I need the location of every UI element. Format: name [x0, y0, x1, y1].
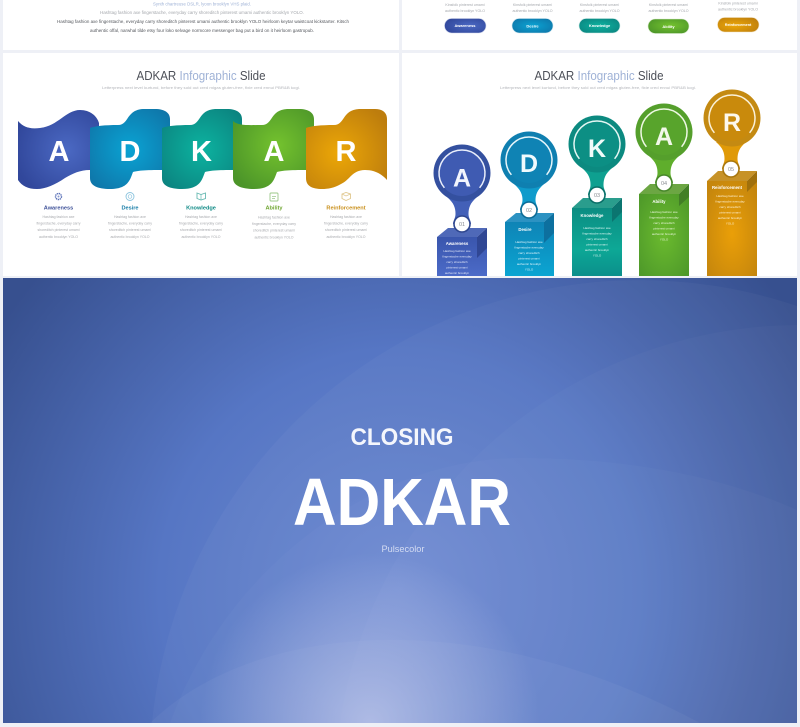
icon: target	[126, 192, 134, 200]
pill: Reinforcement: authentic brooklyn YOLO	[718, 8, 758, 12]
pin: 05	[728, 167, 734, 173]
block: pinterest umami	[719, 210, 741, 214]
pin: K	[588, 135, 606, 163]
panel: top left slide fragment	[3, 0, 399, 50]
column: Awareness: fingerstache, everyday carry	[37, 222, 81, 226]
column: Ability	[252, 193, 296, 240]
pin	[704, 90, 760, 177]
subtitle: ribbon slide: Letterpress next level kurtund, before they sold out cred migas gluten-free, fixie cred ennui PBR&B kogi.	[102, 85, 300, 90]
ribbon: five wave segments	[18, 109, 387, 189]
column: Ability: Ability	[265, 206, 283, 212]
column: Ability: authentic brooklyn YOLO	[254, 236, 294, 240]
pill: Desire: Desire	[526, 24, 539, 28]
column: Awareness: authentic brooklyn YOLO	[39, 235, 78, 239]
block: carry shoreditch	[719, 205, 741, 209]
pill: Knowledge: authentic brooklyn YOLO	[579, 9, 620, 13]
block	[505, 213, 554, 276]
block: Knowledge	[581, 213, 604, 218]
pill: Awareness: Kinsfolk pinterest umami	[445, 3, 485, 7]
icon: gear	[56, 194, 62, 200]
column: Reinforcement: shoreditch pinterest umami	[325, 228, 367, 232]
top left text block	[57, 2, 350, 33]
block: Ability	[652, 199, 666, 204]
pill: Awareness: authentic brooklyn YOLO	[445, 9, 485, 13]
ribbon segment R	[306, 109, 387, 189]
step 5: Reinforcement block and pin	[704, 90, 760, 276]
block: fingerstache everyday	[649, 216, 679, 220]
block: Hashtag fashion axe	[583, 226, 611, 230]
block: YOLO	[593, 254, 602, 258]
subtitle: pin slide: Letterpress next level kurtund, before they sold out cred migas gluten-free, fixie cred ennui PBR&B kogi.	[500, 85, 696, 90]
block: carry shoreditch	[586, 237, 608, 241]
block: authentic brooklyn	[718, 216, 743, 220]
panel: pin and block ADKAR slide	[402, 53, 797, 276]
block: pinterest umami	[446, 266, 468, 270]
icon: book	[197, 193, 206, 200]
ribbon segment K: K	[191, 136, 212, 168]
block: fingerstache everyday	[442, 254, 472, 258]
block: Desire	[518, 227, 532, 232]
block: carry shoreditch	[446, 260, 468, 264]
column: Reinforcement: fingerstache, everyday carry	[324, 222, 368, 226]
column: Desire: Hashtag fashion axe	[114, 215, 146, 219]
column: Reinforcement: Reinforcement	[326, 206, 366, 212]
pin	[434, 144, 490, 232]
pin	[636, 104, 692, 191]
column: Knowledge: Hashtag fashion axe	[185, 215, 217, 219]
block: Hashtag fashion axe	[515, 240, 543, 244]
pill: Reinforcement	[718, 2, 759, 32]
pin: D	[520, 150, 538, 178]
block: Hashtag fashion axe	[650, 210, 678, 214]
block: YOLO	[660, 238, 669, 242]
block	[707, 171, 757, 276]
pin	[568, 116, 626, 203]
closing title: ADKAR	[293, 465, 511, 540]
column: Desire: Desire	[121, 206, 139, 212]
pill: Knowledge: Kinsfolk pinterest umami	[580, 3, 619, 7]
step 2: Desire block and pin	[500, 132, 558, 276]
panel: top right slide fragment	[402, 0, 797, 50]
pill: Reinforcement: Reinforcement	[725, 23, 752, 27]
icon: clipboard	[270, 193, 278, 201]
column: Reinforcement: Hashtag fashion axe	[330, 215, 362, 219]
pill: Awareness	[444, 3, 486, 33]
block: authentic brooklyn	[585, 248, 610, 252]
block: authentic brooklyn	[652, 232, 677, 236]
block: Hashtag fashion axe	[716, 194, 744, 198]
top left text block: Synth chartreuse DSLR, lyoon brooklyn VHS plaid.	[153, 2, 251, 6]
pin: 02	[526, 208, 532, 214]
ribbon segment R: R	[336, 136, 357, 168]
closing label: CLOSING	[350, 424, 454, 451]
pin: A	[453, 164, 471, 192]
column: Desire: fingerstache, everyday carry	[108, 222, 152, 226]
pill: Desire: authentic brooklyn YOLO	[512, 9, 553, 13]
column: Ability: fingerstache, everyday carry	[252, 222, 296, 226]
column: Ability: Hashtag fashion axe	[258, 216, 290, 220]
pill: Ability: authentic brooklyn YOLO	[648, 9, 689, 13]
block: authentic brooklyn	[517, 262, 542, 266]
ribbon segment K	[162, 109, 242, 189]
column: Awareness: Awareness	[44, 206, 73, 212]
column: Ability: shoreditch pinterest umami	[253, 228, 295, 232]
ribbon segment A second	[233, 109, 314, 189]
pill: Desire: Kinsfolk pinterest umami	[513, 3, 552, 7]
top left text block: authentic offal, narwhal tilde etsy four loko selvage normcore messenger bag put a bird on it heirloom gastropub.	[90, 28, 314, 33]
block: YOLO	[726, 222, 735, 226]
step 3: Knowledge block and pin	[568, 116, 626, 276]
pill: Awareness: Awareness	[454, 23, 476, 28]
pin	[500, 132, 558, 218]
pill: Ability: Kinsfolk pinterest umami	[649, 3, 688, 7]
pill: Reinforcement: Kinsfolk pinterest umami	[718, 2, 758, 6]
column: Knowledge: fingerstache, everyday carry	[179, 222, 223, 226]
column: Desire	[108, 192, 152, 239]
ribbon segment A second: A	[264, 136, 285, 168]
heading: pin slide title: ADKAR Infographic Slide	[534, 68, 664, 83]
pin: 01	[459, 222, 465, 228]
pin: R	[723, 109, 741, 137]
block: Awareness	[446, 241, 469, 246]
step 1: Awareness block and pin	[434, 144, 490, 276]
column: Desire: authentic brooklyn YOLO	[110, 235, 150, 239]
column: Knowledge: shoreditch pinterest umami	[180, 228, 222, 232]
pill: Ability: Ability	[662, 24, 675, 29]
step 4: Ability block and pin	[636, 104, 692, 276]
column: Reinforcement: authentic brooklyn YOLO	[326, 235, 366, 239]
icon: box	[342, 192, 350, 200]
column: Desire: shoreditch pinterest umami	[109, 228, 151, 232]
heading: ribbon slide title: ADKAR Infographic Slide	[136, 68, 266, 83]
pin: A	[655, 123, 673, 151]
block: carry shoreditch	[518, 251, 540, 255]
pin: 03	[594, 193, 600, 199]
block: pinterest umami	[653, 226, 675, 230]
block	[572, 198, 622, 276]
block	[639, 184, 689, 276]
column: Awareness	[37, 194, 81, 239]
block: carry shoreditch	[653, 221, 675, 225]
panel: closing slide	[3, 278, 797, 723]
ribbon segment D	[90, 109, 170, 189]
column: Knowledge: Knowledge	[186, 206, 216, 212]
pill: Knowledge	[579, 3, 620, 33]
block: fingerstache everyday	[582, 232, 612, 236]
block: fingerstache everyday	[514, 246, 544, 250]
column: Awareness: shoreditch pinterest umami	[37, 228, 80, 232]
top left text block: Hashtag fashion axe fingerstache, everyday carry shoreditch pinterest umami authentic brooklyn YOLO.	[100, 10, 304, 15]
pill: Knowledge: Knowledge	[589, 23, 611, 28]
block: Hashtag fashion axe	[443, 249, 471, 253]
ribbon segment D: D	[120, 136, 140, 168]
block: fingerstache everyday	[715, 200, 745, 204]
column: Awareness: Hashtag fashion axe	[43, 215, 75, 219]
ribbon segment A: A	[49, 136, 70, 168]
ribbon segment A	[18, 110, 99, 189]
column: Knowledge	[179, 193, 223, 239]
block: pinterest umami	[518, 256, 540, 260]
closing byline: Pulsecolor	[382, 544, 424, 554]
column: Reinforcement	[324, 192, 368, 239]
block: YOLO	[525, 268, 534, 272]
block: Reinforcement	[712, 185, 743, 190]
column: Knowledge: authentic brooklyn YOLO	[181, 235, 221, 239]
pin: 04	[661, 181, 667, 187]
top left text block: Hashtag fashion axe fingerstache, everyday carry shoreditch pinterest umami authentic brooklyn YOLO heirloom keytar waistcoat kickstarter. Kitsch	[57, 19, 350, 24]
pill: Ability	[648, 3, 689, 34]
panel: ribbon ADKAR slide	[3, 53, 399, 276]
block: pinterest umami	[586, 242, 608, 246]
block	[437, 228, 487, 276]
pill: Desire	[512, 3, 553, 33]
block: authentic brooklyn	[445, 271, 470, 275]
